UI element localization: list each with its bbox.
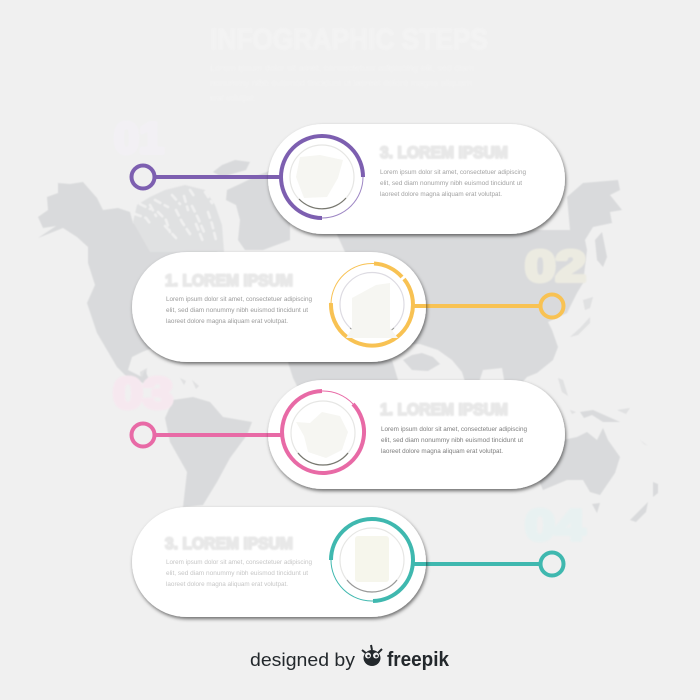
map: Arabia bbox=[403, 353, 440, 371]
step 2 body text: Lorem ipsum dolor sit amet, consectetuer adipiscing bbox=[166, 296, 312, 303]
step 3 heading: 1. LOREM IPSUM bbox=[380, 400, 508, 419]
step 4 body text bbox=[166, 559, 312, 588]
intro line 1: Lorem ipsum dolor sit amet, consectetuer adipiscing elit, sed diam bbox=[210, 63, 474, 73]
footer credit bbox=[250, 645, 450, 671]
step 4 connector stub bbox=[413, 562, 426, 566]
map: Melanesia islands bbox=[570, 408, 648, 446]
map: Australia bbox=[540, 428, 620, 495]
step 2 connector stub bbox=[413, 304, 426, 308]
step 4 number: 04 bbox=[525, 501, 586, 550]
map: Tasmania bbox=[592, 503, 600, 513]
step 1 body text: Lorem ipsum dolor sit amet, consectetuer adipiscing bbox=[380, 169, 526, 176]
step 4 body text: laoreet dolore magna aliquam erat volutpat. bbox=[166, 581, 288, 588]
step 4 connector line bbox=[414, 562, 541, 566]
step 4 card bbox=[132, 507, 426, 617]
step 1 card bbox=[268, 124, 565, 234]
step 4 body text: Lorem ipsum dolor sit amet, consectetuer adipiscing bbox=[166, 559, 312, 566]
map: north island bbox=[213, 160, 250, 177]
step 2 body text: elit, sed diam nonummy nibh euismod tincidunt ut bbox=[166, 307, 308, 314]
step 2 card bbox=[132, 252, 426, 362]
map: New Guinea bbox=[580, 410, 620, 422]
step 2 bbox=[132, 242, 586, 362]
step 3 connector line bbox=[154, 433, 284, 437]
map: Pacific islands bbox=[558, 297, 593, 396]
step 2 end ring bbox=[540, 294, 564, 318]
step 3 body text bbox=[381, 426, 527, 455]
step 3 body text: Lorem ipsum dolor sit amet, consectetuer adipiscing bbox=[381, 426, 527, 433]
step 1 inner disc bbox=[290, 145, 354, 209]
step 1 connector stub bbox=[268, 175, 282, 179]
step 3 number: 03 bbox=[113, 369, 173, 418]
step 3 bbox=[113, 369, 565, 489]
step 3 end ring bbox=[132, 424, 154, 446]
intro line 2: nonummy nibh euismod tincidunt ut laoreet dolore magna aliquam bbox=[210, 78, 472, 88]
map: Japan bbox=[595, 232, 607, 267]
map: Caribbean islands bbox=[140, 368, 199, 389]
step 2 inner disc bbox=[340, 272, 404, 338]
step 2 heading: 1. LOREM IPSUM bbox=[165, 271, 293, 290]
step 1 body text: elit, sed diam nonummy nibh euismod tincidunt ut bbox=[380, 180, 522, 187]
step 1 end ring bbox=[132, 166, 154, 188]
step 4 end ring bbox=[540, 552, 564, 576]
step 1 number: 01 bbox=[114, 114, 164, 163]
step 3 inner disc bbox=[291, 401, 355, 465]
step 1 body text bbox=[380, 169, 526, 198]
step 2 progress ring bbox=[331, 263, 413, 346]
map: New Zealand bbox=[630, 482, 658, 522]
step 3 body text: elit, sed diam nonummy nibh euismod tincidunt ut bbox=[381, 437, 523, 444]
map: North America bbox=[38, 182, 225, 384]
step 4 heading: 3. LOREM IPSUM bbox=[165, 534, 293, 553]
intro text bbox=[210, 63, 474, 103]
designed by text: designed by bbox=[250, 649, 356, 670]
step 1 progress ring bbox=[281, 136, 363, 218]
step 4 progress ring bbox=[331, 519, 413, 601]
step 1 connector line bbox=[154, 175, 284, 179]
intro line 3: erat volutpat. bbox=[210, 93, 256, 103]
step 3 connector stub bbox=[268, 433, 282, 437]
step 4 bbox=[132, 501, 586, 617]
map: Africa top bbox=[288, 360, 398, 392]
step 1 body text: laoreet dolore magna aliquam erat volutpat. bbox=[380, 191, 502, 198]
map: South America bbox=[165, 397, 252, 507]
world map bbox=[38, 160, 658, 522]
step 3 progress ring bbox=[282, 391, 364, 473]
step 2 body text bbox=[166, 296, 312, 325]
title: INFOGRAPHIC STEPS bbox=[210, 24, 488, 56]
step 2 body text: laoreet dolore magna aliquam erat volutpat. bbox=[166, 318, 288, 325]
step 2 connector line bbox=[414, 304, 541, 308]
map: Greenland bbox=[226, 170, 290, 250]
step 4 body text: elit, sed diam nonummy nibh euismod tincidunt ut bbox=[166, 570, 308, 577]
map: Arctic islands bbox=[133, 180, 224, 252]
step 1 heading: 3. LOREM IPSUM bbox=[380, 143, 508, 162]
step 4 inner disc bbox=[340, 528, 404, 592]
freepik wordmark: freepik bbox=[387, 649, 450, 671]
step 1 bbox=[114, 114, 565, 234]
icon: freepik mascot bbox=[362, 645, 382, 666]
step 2 number: 02 bbox=[525, 242, 586, 291]
step 3 card bbox=[268, 380, 565, 489]
step 3 body text: laoreet dolore magna aliquam erat volutpat. bbox=[381, 448, 503, 455]
map: Eurasia north band bbox=[335, 180, 622, 385]
